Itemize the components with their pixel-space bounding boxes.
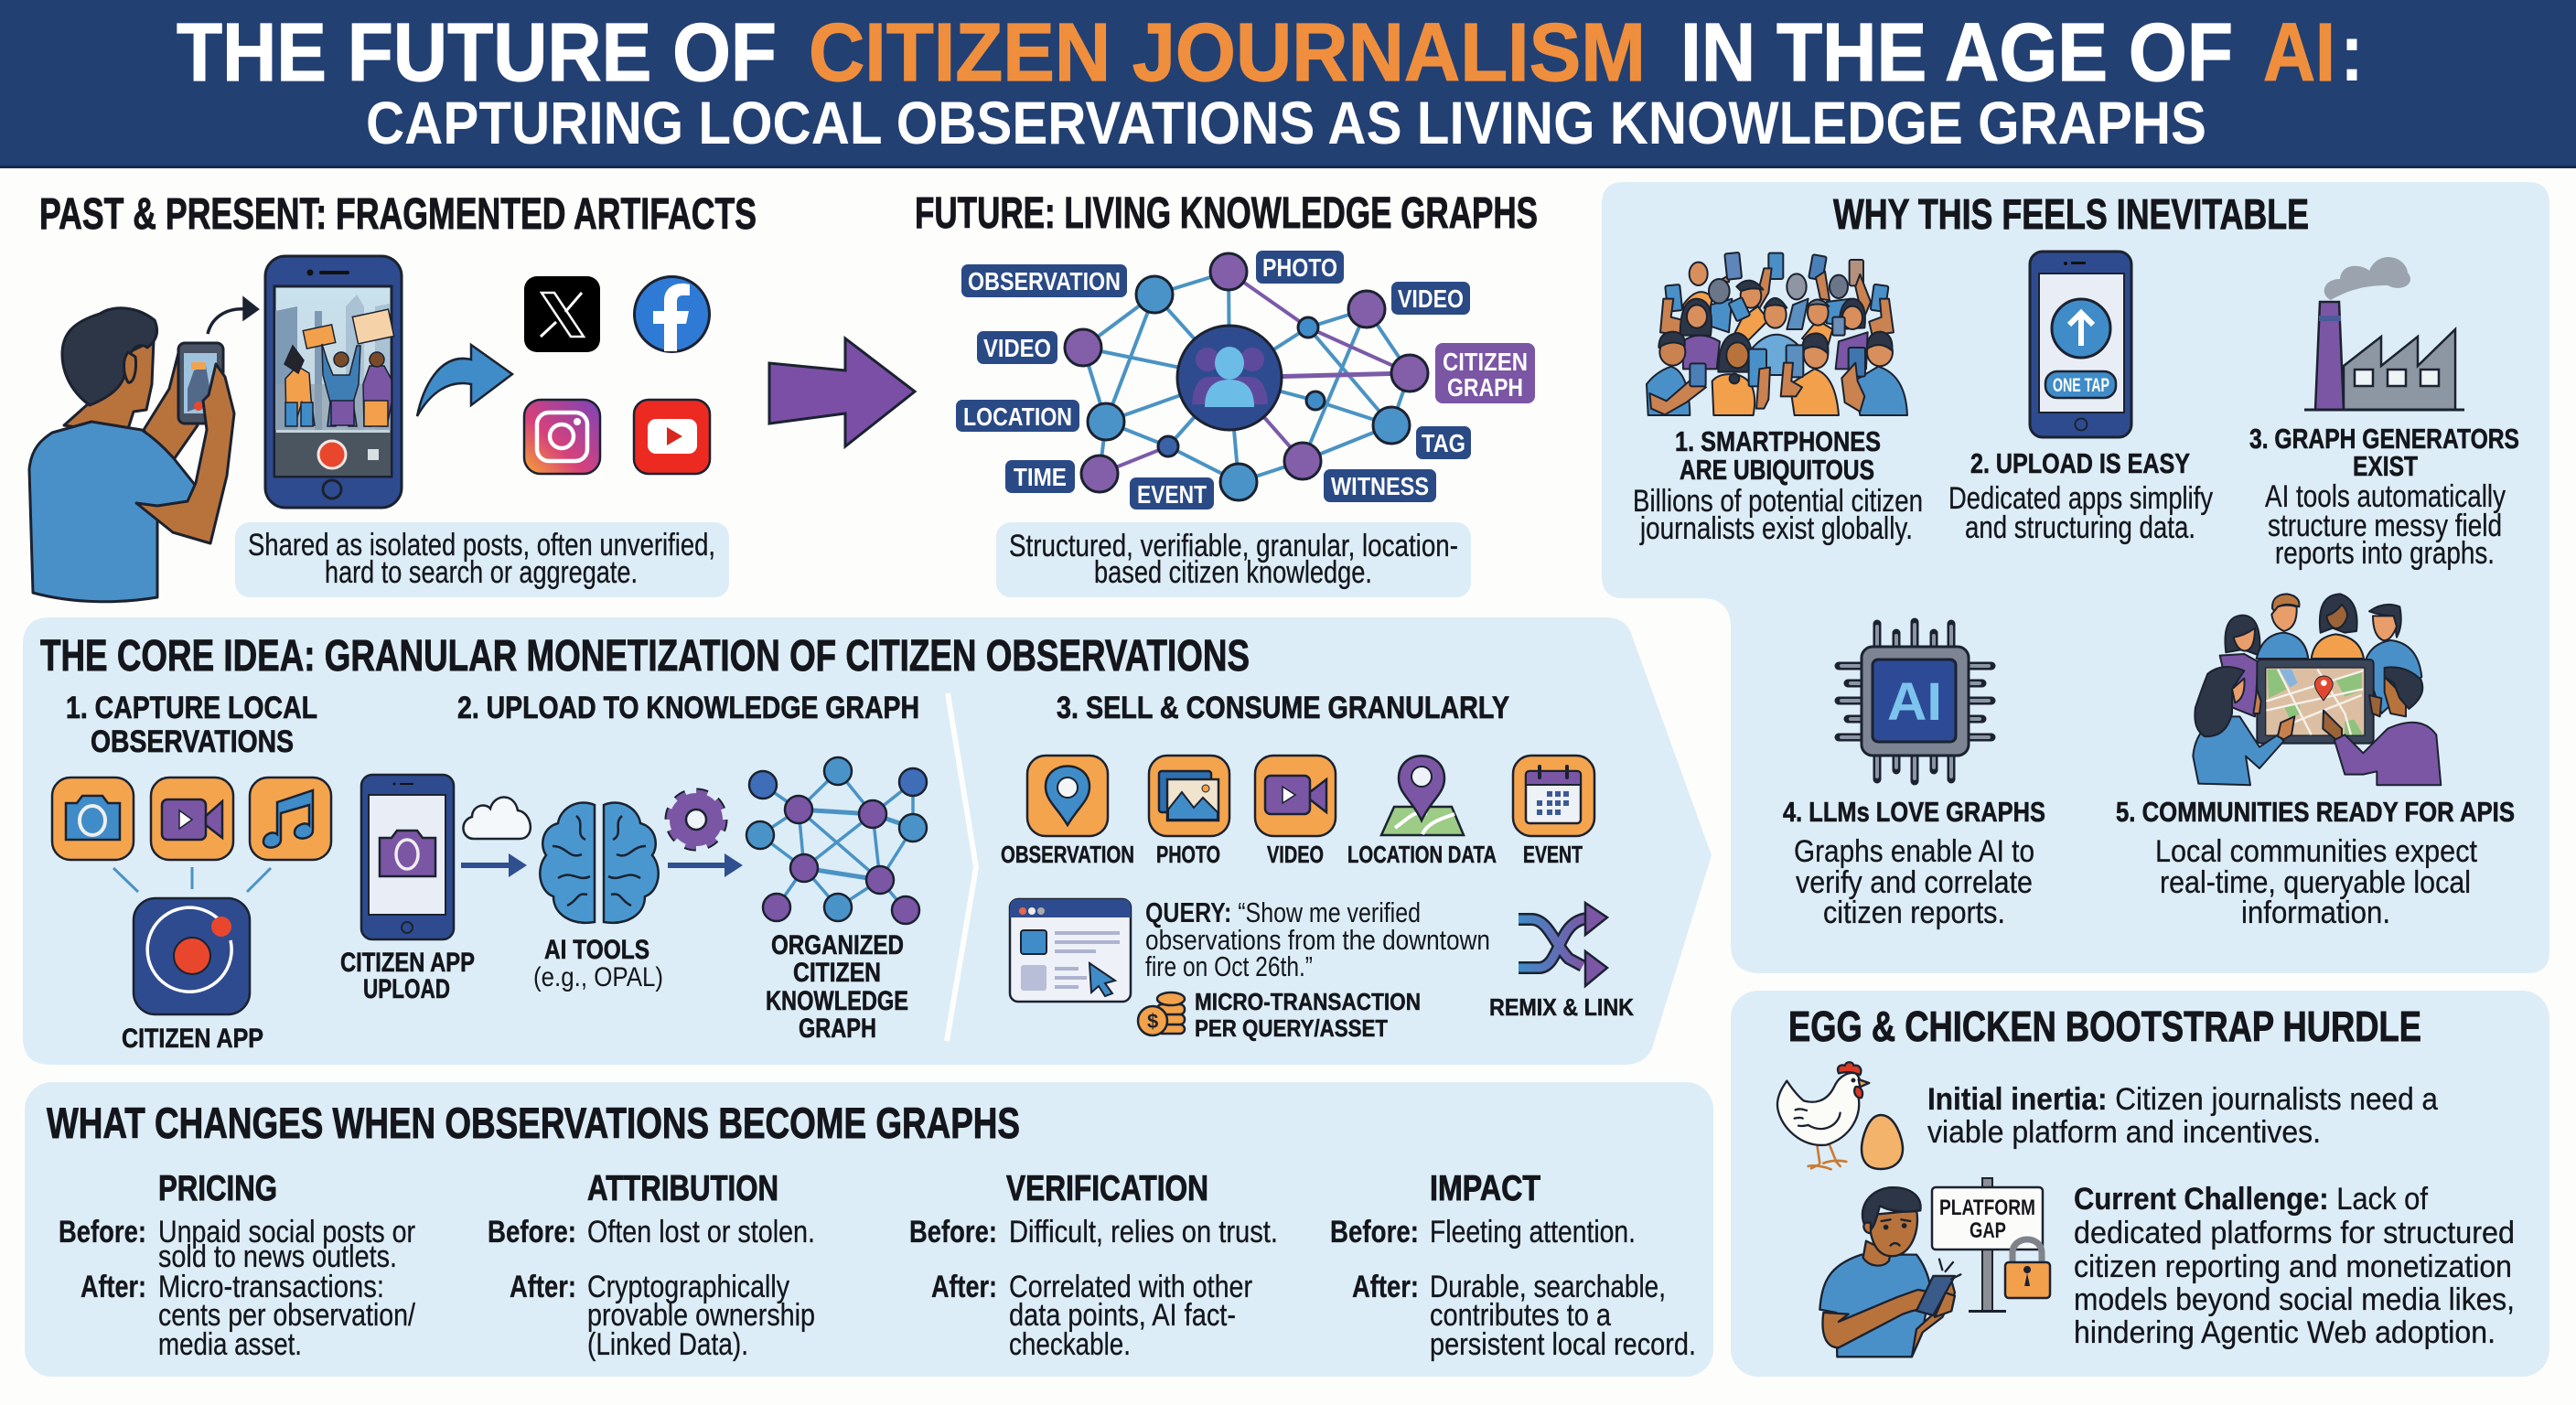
icon: platform gap sign with lock: PLATFORM [1939, 1196, 2035, 1220]
column: verification: After: [931, 1270, 997, 1304]
icon: event calendar [1513, 756, 1594, 836]
column: attribution: After: [510, 1270, 576, 1304]
column: attribution: (Linked Data). [587, 1327, 748, 1362]
icon: YouTube logo [634, 400, 710, 474]
icon: brain [540, 803, 659, 923]
icon: upload phone [361, 775, 454, 939]
column: verification: Correlated with other [1009, 1270, 1252, 1304]
column: attribution: Often lost or stolen. [587, 1215, 815, 1249]
icon: AI chip: AI [1887, 672, 1942, 732]
icon: location data map [1381, 756, 1464, 835]
column: attribution: ATTRIBUTION [587, 1169, 778, 1208]
label: photo: PHOTO [1262, 253, 1337, 282]
label: video right: VIDEO [1398, 284, 1464, 313]
text: current challenge: dedicated platforms for structured [2074, 1216, 2515, 1250]
icon: citizen group [1192, 347, 1268, 407]
text: smartphones are ubiquitous [1633, 425, 1923, 546]
icon: browser query window [1010, 899, 1131, 1002]
labels: asset types: EVENT [1523, 841, 1583, 868]
text: LLMs love graphs: 4. LLMs LOVE GRAPHS [1783, 796, 2045, 828]
column: impact: contributes to a [1430, 1298, 1611, 1333]
chart: knowledge graph network [956, 251, 1535, 509]
column: attribution: Before: [488, 1215, 576, 1249]
labels: asset types: PHOTO [1156, 841, 1220, 868]
caption: fragmented artifacts: hard to search or aggregate. [325, 555, 638, 590]
caption: fragmented artifacts: Shared as isolated posts, often unverified, [248, 528, 715, 563]
label: organized citizen knowledge graph: CITIZEN [793, 958, 881, 988]
labels: asset types: LOCATION DATA [1347, 841, 1497, 868]
panel: egg and chicken [1731, 991, 2549, 1377]
icon: platform gap sign with lock [1932, 1178, 2050, 1313]
icon: observation pin [1027, 756, 1108, 836]
arrow: upload to AI [461, 853, 527, 877]
label: witness: WITNESS [1331, 472, 1429, 500]
icon: crowd with smartphones [1647, 252, 1907, 415]
panel: future living knowledge graphs [915, 189, 1538, 597]
text: graph generators exist: EXIST [2353, 450, 2418, 482]
divider: white chevron [947, 693, 976, 1041]
caption: structured knowledge: Structured, verifiable, granular, location- [1009, 529, 1458, 563]
label: observation: OBSERVATION [968, 267, 1121, 295]
label: organized citizen knowledge graph: ORGANIZED [771, 930, 904, 960]
column: attribution: provable ownership [587, 1298, 815, 1333]
icon: video tile [151, 778, 233, 860]
step 2 heading: 2. UPLOAD TO KNOWLEDGE GRAPH [457, 691, 919, 725]
text: graph generators exist [2249, 423, 2519, 571]
column: verification: checkable. [1009, 1327, 1131, 1362]
column: attribution: Cryptographically [587, 1270, 789, 1304]
icon: worried man with phone [1819, 1187, 1960, 1357]
heading: past and present: PAST & PRESENT: FRAGMENTED ARTIFACTS [39, 190, 757, 239]
heading: future: FUTURE: LIVING KNOWLEDGE GRAPHS [915, 189, 1538, 238]
text: LLMs love graphs: Graphs enable AI to [1794, 834, 2034, 869]
step 1 heading: 1. CAPTURE LOCAL [66, 691, 317, 725]
title [177, 7, 2364, 99]
text: current challenge [2074, 1182, 2515, 1350]
label: organized citizen knowledge graph: KNOWLEDGE [766, 986, 908, 1016]
label: AI tools: (e.g., OPAL) [533, 962, 663, 992]
column: pricing: Before: [59, 1215, 146, 1249]
icon: chicken [1777, 1062, 1869, 1169]
text: upload is easy: Dedicated apps simplify [1948, 481, 2213, 516]
label: citizen graph: GRAPH [1447, 373, 1523, 402]
icon: graph factory [2304, 257, 2464, 410]
text: micro-transaction: PER QUERY/ASSET [1195, 1014, 1388, 1042]
title: CITIZEN JOURNALISM [809, 7, 1646, 99]
title: THE FUTURE OF [177, 7, 777, 99]
column: attribution [488, 1169, 815, 1362]
label: organized citizen knowledge graph: GRAPH [799, 1014, 876, 1044]
text: upload is easy: 2. UPLOAD IS EASY [1970, 447, 2190, 479]
label: citizen app: CITIZEN APP [122, 1024, 263, 1054]
column: pricing: PRICING [158, 1169, 277, 1208]
column: pricing: media asset. [158, 1327, 302, 1362]
text: graph generators exist: structure messy field [2268, 509, 2502, 543]
panel: past and present [29, 190, 757, 602]
icon: AI chip [1839, 622, 1991, 781]
heading: core idea: THE CORE IDEA: GRANULAR MONETIZATION OF CITIZEN OBSERVATIONS [40, 632, 1250, 681]
text: communities ready for APIs: real-time, queryable local [2160, 865, 2471, 900]
icon: platform gap sign with lock: GAP [1970, 1218, 2006, 1243]
label: time: TIME [1014, 463, 1067, 491]
text: initial inertia [1927, 1082, 2438, 1150]
column: pricing [59, 1169, 415, 1362]
panel: core idea [23, 617, 1712, 1065]
icon: Instagram logo [524, 400, 600, 474]
text: micro-transaction: MICRO-TRANSACTION [1195, 988, 1421, 1015]
text: smartphones are ubiquitous: journalists exist globally. [1639, 511, 1913, 546]
column: verification: data points, AI fact- [1009, 1298, 1236, 1333]
icon: camera tile [52, 778, 134, 860]
caption: fragmented artifacts [235, 522, 729, 597]
step 1 heading [66, 691, 317, 759]
header banner [0, 0, 2576, 168]
title: : [2340, 7, 2364, 99]
icon: one tap upload phone [2030, 252, 2131, 437]
step 1 heading: OBSERVATIONS [91, 724, 294, 759]
arrow: past to future [769, 338, 915, 446]
label: citizen app upload [340, 948, 475, 1004]
column: pricing: After: [80, 1270, 146, 1304]
text: communities ready for APIs: information. [2241, 896, 2390, 930]
label: citizen app upload: CITIZEN APP [340, 948, 475, 978]
caption: structured knowledge [996, 522, 1471, 597]
panel: what changes [25, 1082, 1713, 1377]
heading: what changes: WHAT CHANGES WHEN OBSERVATIONS BECOME GRAPHS [47, 1099, 1020, 1147]
arrow: AI to graph [668, 853, 743, 877]
text: current challenge: Current Challenge: Lack of [2074, 1182, 2428, 1217]
text: LLMs love graphs [1783, 796, 2045, 930]
icon: blue arrow to social networks [417, 345, 512, 416]
icon: cloud [463, 798, 531, 839]
column: pricing: cents per observation/ [158, 1298, 415, 1333]
column: impact: After: [1352, 1270, 1419, 1304]
label: AI tools [533, 935, 663, 992]
subtitle: CAPTURING LOCAL OBSERVATIONS AS LIVING KNOWLEDGE GRAPHS [366, 89, 2206, 156]
icon: person filming with phone [29, 308, 234, 602]
icon: egg [1862, 1115, 1903, 1169]
column: impact: persistent local record. [1430, 1327, 1696, 1362]
text: LLMs love graphs: verify and correlate [1796, 865, 2033, 900]
label: tag: TAG [1422, 429, 1465, 457]
text: current challenge: models beyond social media likes, [2074, 1282, 2515, 1317]
text: query: QUERY: “Show me verified [1145, 896, 1421, 928]
icon: community around map tablet [2193, 594, 2441, 785]
text: smartphones are ubiquitous: 1. SMARTPHONES [1675, 425, 1881, 457]
text: current challenge: hindering Agentic Web adoption. [2074, 1315, 2496, 1350]
column: pricing: sold to news outlets. [158, 1239, 397, 1274]
label: AI tools: AI TOOLS [544, 935, 649, 965]
column: verification: VERIFICATION [1006, 1169, 1208, 1208]
label: location: LOCATION [963, 402, 1072, 431]
step 3 heading: 3. SELL & CONSUME GRANULARLY [1057, 691, 1509, 725]
column: pricing: Unpaid social posts or [158, 1215, 415, 1249]
column: verification: Before: [909, 1215, 997, 1249]
title: IN THE AGE OF [1680, 7, 2233, 99]
column: verification [909, 1169, 1278, 1362]
icon: music tile [250, 778, 331, 860]
heading: why: WHY THIS FEELS INEVITABLE [1833, 190, 2309, 238]
icon: coins [1138, 992, 1185, 1035]
text: query: observations from the downtown [1145, 924, 1490, 956]
text: graph generators exist: AI tools automatically [2265, 479, 2506, 514]
icon: gear [671, 794, 722, 845]
text: query [1145, 896, 1490, 982]
icon: one tap upload phone: ONE TAP [2053, 375, 2109, 396]
column: impact: Before: [1330, 1215, 1419, 1249]
text: upload is easy: and structuring data. [1965, 510, 2195, 545]
heading: egg and chicken: EGG & CHICKEN BOOTSTRAP HURDLE [1788, 1003, 2421, 1050]
text: query: fire on Oct 26th.” [1145, 950, 1313, 982]
column: impact: Fleeting attention. [1430, 1215, 1636, 1249]
text: micro-transaction [1195, 988, 1421, 1042]
label: remix and link: REMIX & LINK [1489, 993, 1634, 1021]
label: citizen graph: CITIZEN [1443, 348, 1528, 376]
label: organized citizen knowledge graph [766, 930, 908, 1044]
icon: video tile [1255, 756, 1336, 836]
text: smartphones are ubiquitous: ARE UBIQUITOUS [1680, 454, 1874, 486]
icon: Facebook logo [635, 276, 710, 351]
column: impact [1330, 1169, 1696, 1362]
chart: organized knowledge graph [746, 757, 927, 924]
column: impact: IMPACT [1430, 1169, 1540, 1208]
label: video left: VIDEO [983, 334, 1051, 362]
text: initial inertia: viable platform and incentives. [1927, 1115, 2321, 1150]
text: current challenge: citizen reporting and monetization [2074, 1249, 2512, 1284]
column: impact: Durable, searchable, [1430, 1270, 1666, 1304]
icon: photo tile [1149, 756, 1229, 836]
text: LLMs love graphs: citizen reports. [1823, 896, 2005, 930]
labels: asset types: OBSERVATION [1001, 841, 1134, 868]
text: upload is easy [1948, 447, 2213, 545]
icon: remix shuffle [1519, 903, 1607, 986]
label: event: EVENT [1137, 480, 1207, 509]
column: verification: Difficult, relies on trust. [1009, 1215, 1278, 1249]
panel: why this feels inevitable [1602, 182, 2549, 973]
icon: citizen app [134, 898, 250, 1014]
icon: coins: $ [1147, 1010, 1158, 1033]
caption: structured knowledge: based citizen knowledge. [1094, 555, 1372, 590]
labels: asset types: VIDEO [1267, 841, 1324, 868]
label: citizen graph [1435, 343, 1535, 403]
icon: big phone with protest scene [265, 256, 402, 508]
label: citizen app upload: UPLOAD [363, 974, 450, 1004]
text: communities ready for APIs [2116, 796, 2515, 930]
title: AI [2263, 7, 2335, 99]
column: pricing: Micro-transactions: [158, 1270, 384, 1304]
text: initial inertia: Initial inertia: Citizen journalists need a [1927, 1082, 2438, 1117]
labels: asset types [1001, 841, 1583, 868]
text: communities ready for APIs: Local communities expect [2155, 834, 2477, 869]
icon: X logo [524, 276, 600, 352]
text: smartphones are ubiquitous: Billions of potential citizen [1633, 484, 1923, 519]
icon: curved arrow to phone [208, 299, 257, 334]
text: graph generators exist: reports into graphs. [2275, 536, 2495, 571]
